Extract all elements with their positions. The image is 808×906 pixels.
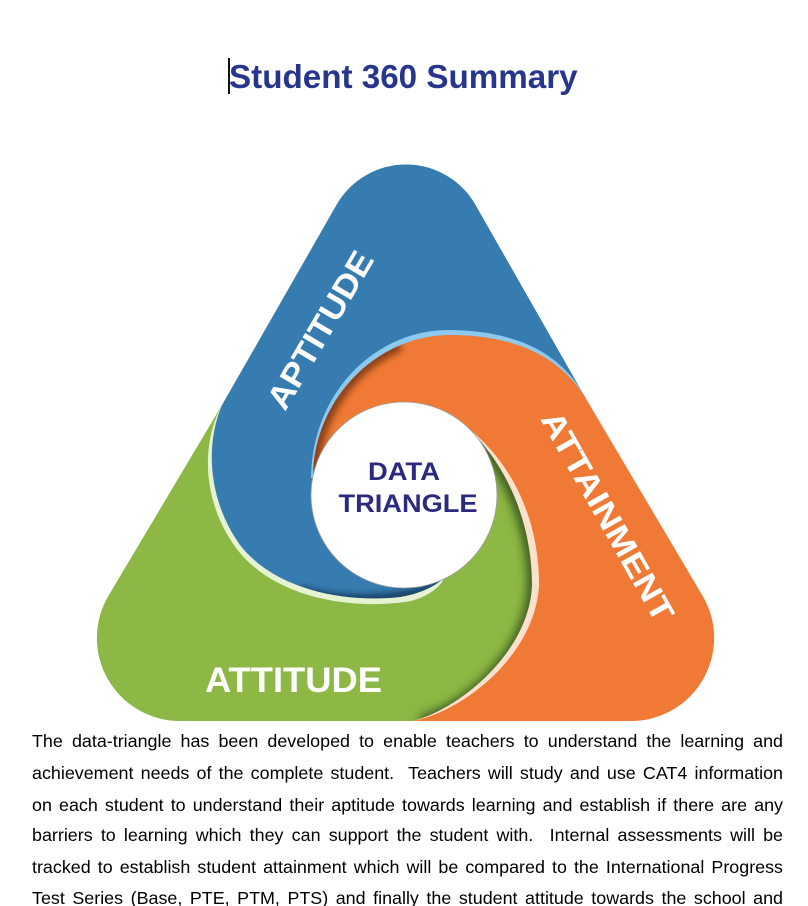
center white circle [311,402,497,588]
body paragraph: on each student to understand their aptitude towards learning and establish if there are any [32,795,783,815]
body paragraph [32,731,783,906]
data triangle diagram [96,164,714,721]
body paragraph: tracked to establish student attainment which will be compared to the International Progress [32,857,783,877]
label: ATTITUDE: ATTITUDE [205,661,382,700]
light green edge below blue [208,405,443,604]
label: DATA: DATA [368,458,440,486]
body paragraph: The data-triangle has been developed to enable teachers to understand the learning and [32,731,783,751]
panel: attainment orange segment [313,335,714,721]
orange segment shadow [312,345,400,480]
panel: aptitude blue segment [212,164,585,598]
text cursor [228,58,230,94]
label: ATTAINMENT: ATTAINMENT [534,405,682,628]
label: APTITUDE: APTITUDE [259,244,381,416]
panel: attitude green segment [97,400,532,721]
green segment shadow [420,425,533,722]
label: TRIANGLE: TRIANGLE [338,490,478,518]
light blue edge above orange [311,330,585,495]
body paragraph: barriers to learning which they can support the student with. Internal assessments will be [32,825,783,845]
blue segment shadow [298,580,441,598]
body paragraph: achievement needs of the complete student. Teachers will study and use CAT4 information [32,763,783,783]
title: Student 360 Summary [229,58,578,96]
peach edge beside green [413,427,539,721]
